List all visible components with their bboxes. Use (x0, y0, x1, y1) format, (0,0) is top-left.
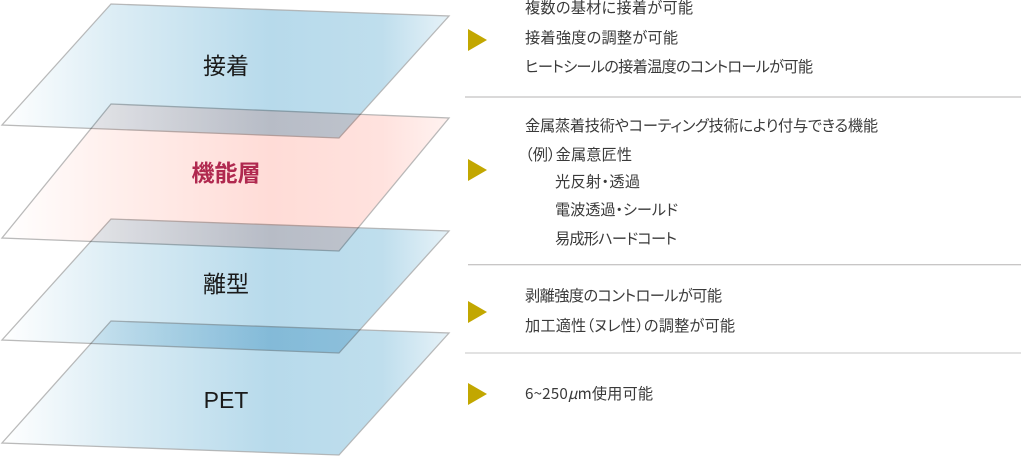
layer: functional: 機能層 (192, 160, 260, 186)
layer: adhesive (2, 4, 449, 138)
text: adhesive features (525, 0, 813, 77)
layer: PET (2, 321, 449, 455)
text: PET features: 6~250μm使用可能 (525, 382, 653, 404)
text: release features: 加工適性（ヌレ性）の調整が可能 (525, 314, 735, 336)
layer: functional (2, 104, 449, 251)
arrow: functional (468, 159, 487, 181)
text: release features: 剥離強度のコントロールが可能 (525, 284, 722, 306)
text: release features (525, 284, 735, 336)
layer: adhesive: 接着 (203, 53, 249, 79)
arrow: PET (468, 383, 487, 405)
arrow: release (468, 301, 487, 323)
arrow: adhesive (468, 29, 487, 51)
layer: release (2, 219, 449, 353)
text: functional features: （例）金属意匠性 (525, 143, 632, 165)
text: adhesive features: 接着強度の調整が可能 (525, 26, 678, 48)
layer: PET: PET (204, 387, 248, 413)
text: adhesive features: ヒートシールの接着温度のコントロールが可能 (525, 55, 813, 77)
text: functional features: 易成形ハードコート (555, 227, 677, 249)
layer: release: 離型 (203, 271, 249, 297)
text: functional features: 金属蒸着技術やコーティング技術により付与できる機能 (525, 114, 878, 136)
text: functional features (525, 114, 878, 249)
text: functional features: 光反射・透過 (555, 170, 640, 192)
text: functional features: 電波透過・シールド (555, 198, 678, 220)
